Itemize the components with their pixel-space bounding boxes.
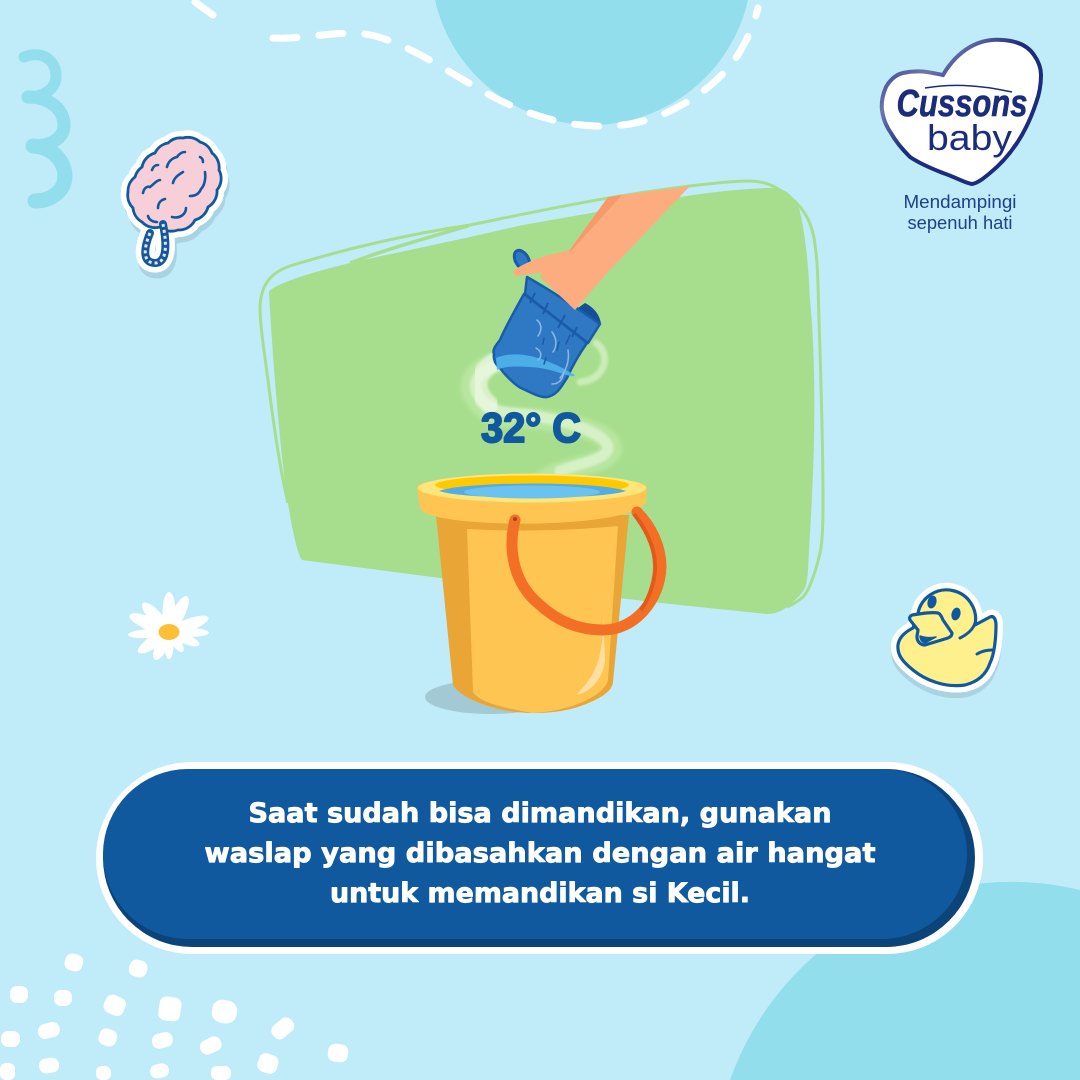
caption text: Saat sudah bisa dimandikan, gunakan xyxy=(248,798,832,829)
logo tagline xyxy=(904,191,1016,233)
sponge rope loop xyxy=(145,224,165,263)
decorative white dots xyxy=(0,952,349,1080)
logo wordmark: baby xyxy=(927,117,1012,158)
caption text: waslap yang dibasahkan dengan air hangat xyxy=(204,838,876,869)
bucket handle xyxy=(512,512,661,630)
caption text xyxy=(204,798,876,909)
steam rising from bucket xyxy=(471,343,612,490)
background circle top xyxy=(435,0,748,125)
water surface xyxy=(439,484,626,498)
bath sponge sticker xyxy=(128,137,223,269)
caption pill xyxy=(96,762,983,954)
washcloth mitt xyxy=(493,248,601,397)
caption text: untuk memandikan si Kecil. xyxy=(330,878,750,909)
green background panel xyxy=(260,181,823,614)
logo wordmark xyxy=(896,83,1028,158)
bucket xyxy=(417,474,661,714)
decorative squiggle number three xyxy=(24,55,65,201)
logo tagline: Mendampingi xyxy=(904,191,1016,212)
mitt loop xyxy=(511,248,533,272)
rubber duck sticker xyxy=(898,590,996,692)
Cussons baby logo xyxy=(882,40,1041,233)
dashed white curve xyxy=(195,2,758,126)
duck beak xyxy=(910,613,952,645)
bucket highlight xyxy=(576,615,605,695)
logo heart xyxy=(882,40,1041,184)
background circle bottom right xyxy=(730,882,1080,1080)
daisy flower xyxy=(127,592,211,662)
logo tagline: sepenuh hati xyxy=(908,212,1012,233)
arm and hand xyxy=(513,186,690,310)
logo wordmark: Cussons xyxy=(896,83,1028,125)
temperature label: 32° C xyxy=(481,404,581,451)
